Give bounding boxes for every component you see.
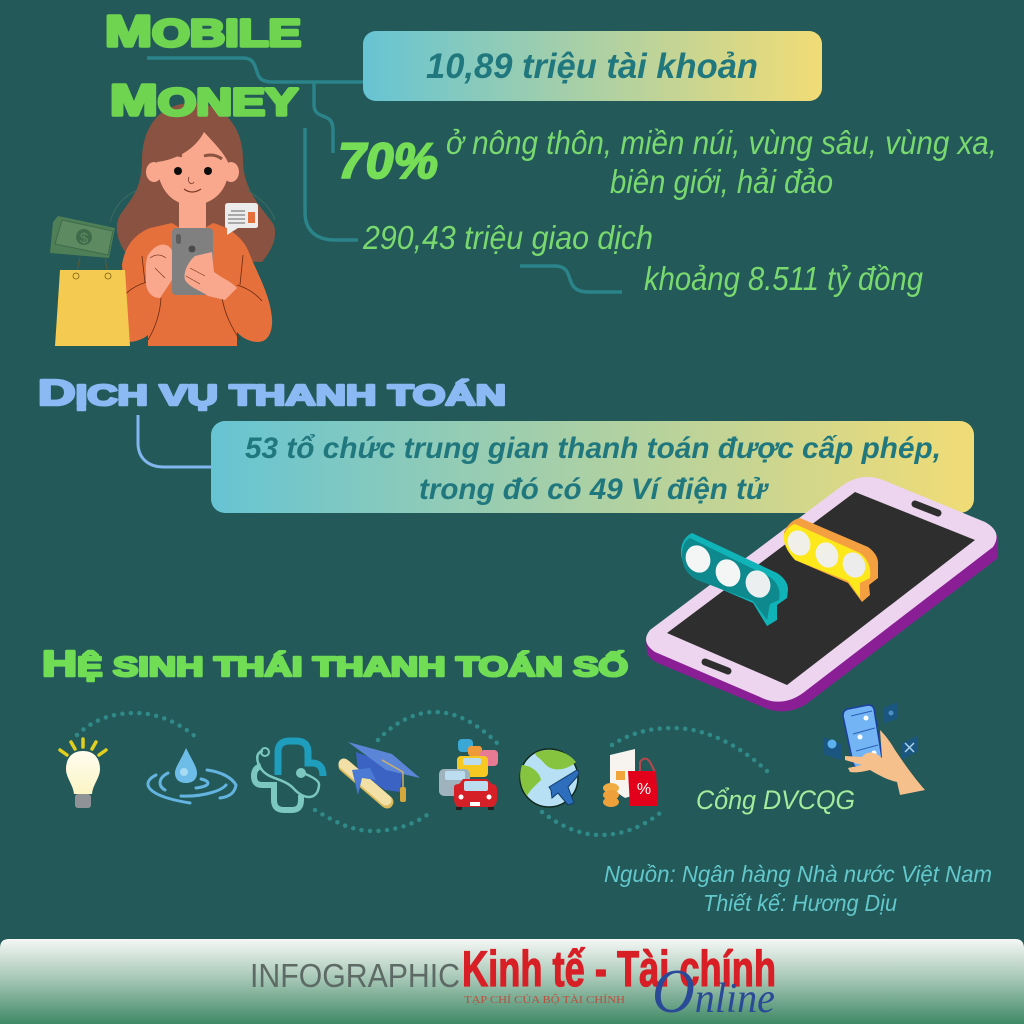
footer banner: Kinh tế - Tài chính xyxy=(462,941,776,997)
text: transactions: 290,43 triệu giao dịch xyxy=(362,219,653,256)
neck xyxy=(179,195,206,235)
setting tiles xyxy=(823,737,841,760)
stat box: accounts: 10,89 triệu tài khoản xyxy=(426,47,758,86)
device xyxy=(843,705,882,767)
hands xyxy=(185,252,237,300)
illustration: woman with phone and shopping bag: $ xyxy=(80,230,89,247)
money xyxy=(50,216,115,258)
icon: health cross with stethoscope xyxy=(254,741,323,810)
heading: digital payment ecosystem: H Ệ SINH THÁI THANH TOÁN SỐ xyxy=(42,643,628,684)
connector: to 70% xyxy=(314,83,333,153)
icon: shopping ticket and bag: % xyxy=(637,781,651,798)
hair xyxy=(117,103,275,262)
footer banner: Online xyxy=(652,958,775,1024)
connector: payment services xyxy=(138,415,212,467)
text: rural areas xyxy=(446,124,997,200)
connector: Mobile Money to accounts xyxy=(147,58,365,82)
stat: 70%: 70% xyxy=(338,133,438,189)
footer banner: TẠP CHÍ CỦA BỘ TÀI CHÍNH xyxy=(464,994,625,1006)
stat box: payment intermediaries: 53 tổ chức trung gian thanh toán được cấp phép, xyxy=(245,432,941,465)
icon: water drop xyxy=(148,748,236,803)
phone side xyxy=(646,535,998,711)
text: transaction value: khoảng 8.511 tỷ đồng xyxy=(644,260,924,297)
icon: graduation cap and diploma xyxy=(344,742,420,802)
icon: cars xyxy=(439,739,498,810)
mobile phone illustration xyxy=(646,477,998,711)
text: rural areas: biên giới, hải đảo xyxy=(610,163,833,200)
footer banner xyxy=(0,939,1024,1024)
face xyxy=(157,132,229,205)
source credit: Thiết kế: Hương Dịu xyxy=(703,890,897,916)
teal chat bubble xyxy=(681,533,788,626)
dotted connection arcs xyxy=(77,712,768,835)
title: Mobile Money xyxy=(105,7,301,125)
connector: transactions to value xyxy=(520,266,622,292)
stat box: payment intermediaries: trong đó có 49 Ví điện tử xyxy=(419,473,770,506)
icon: globe and airplane xyxy=(520,749,579,807)
phone screen xyxy=(667,492,975,685)
phone body xyxy=(646,477,997,702)
bag xyxy=(55,270,130,346)
chat card xyxy=(225,203,258,235)
phone in hand xyxy=(172,228,213,295)
stat box: accounts xyxy=(363,31,822,101)
yellow chat bubble xyxy=(784,518,878,602)
illustration: woman with phone and shopping bag xyxy=(50,103,275,346)
connector: to transactions xyxy=(305,128,358,240)
source credit: Nguồn: Ngân hàng Nhà nước Việt Nam xyxy=(604,861,992,887)
hand xyxy=(845,730,925,795)
icon: shopping ticket and bag xyxy=(603,749,658,807)
ears xyxy=(146,162,162,182)
icon: hand holding phone with settings xyxy=(823,702,925,795)
speakers xyxy=(915,504,938,513)
title: Mobile Money: M ONEY xyxy=(110,76,298,125)
title: Mobile Money: M OBILE xyxy=(105,7,301,56)
source credit xyxy=(604,861,992,916)
icon: light bulb xyxy=(60,739,106,808)
footer banner: INFOGRAPHIC xyxy=(250,957,460,994)
eyebrows and eyes xyxy=(165,155,222,192)
shirt xyxy=(122,223,272,346)
stat box: payment intermediaries xyxy=(211,421,974,513)
heading: payment services: D ỊCH VỤ THANH TOÁN xyxy=(38,372,506,413)
label: national public service portal: Cổng DVCQG xyxy=(696,785,855,815)
bag handles xyxy=(76,257,108,276)
